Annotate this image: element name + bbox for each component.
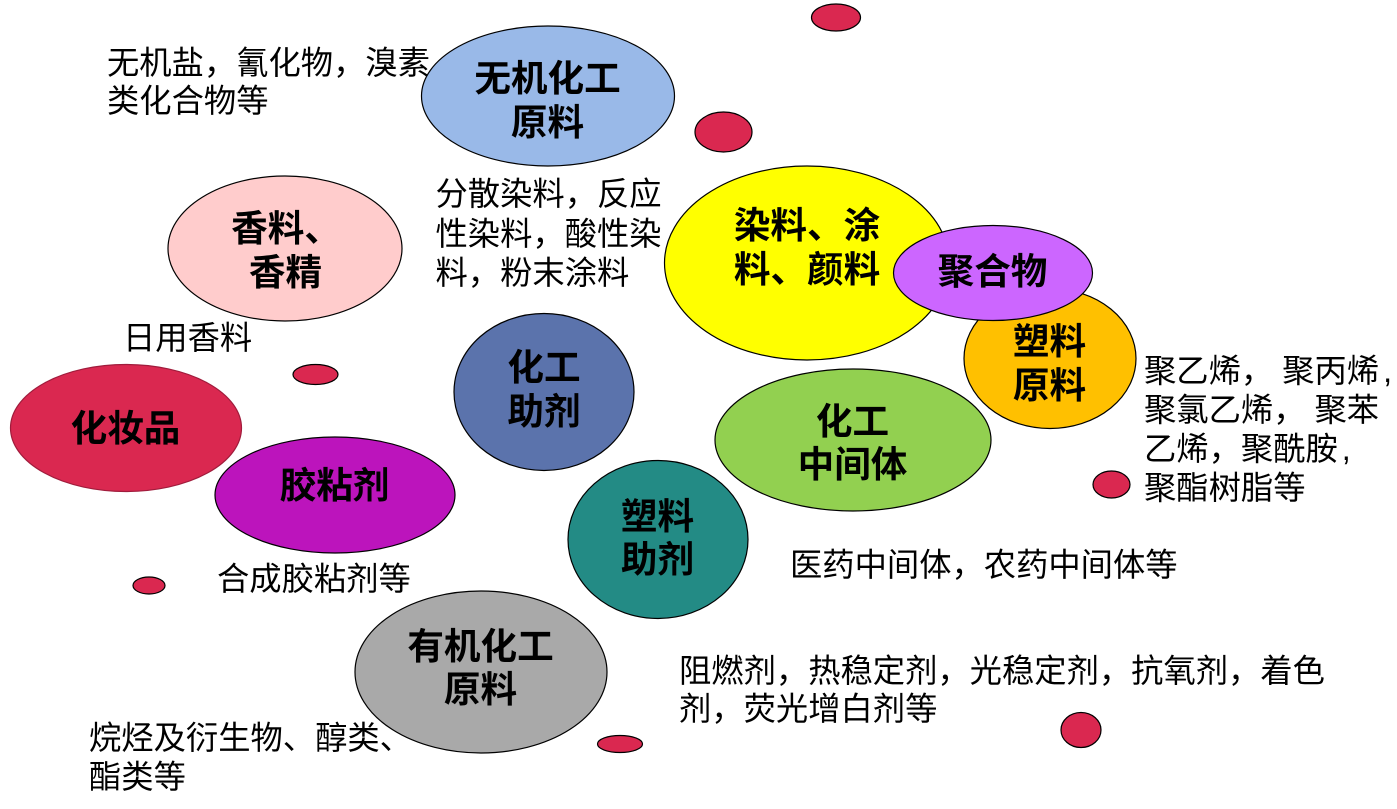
text: plastic examples	[1144, 353, 1392, 506]
bubble: plastic raw materials: 塑料	[1013, 321, 1086, 362]
bubble: adhesives: 胶粘剂	[280, 465, 389, 506]
bubble: inorganic raw materials: 无机化工	[474, 58, 621, 99]
text: plastic auxiliary examples: 剂，荧光增白剂等	[679, 691, 937, 727]
decorative dot: top	[812, 4, 860, 31]
bubble: organic raw materials: 有机化工	[407, 626, 554, 667]
text: plastic examples: 聚乙烯， 聚丙烯,	[1144, 353, 1392, 389]
bubble: plastic auxiliaries: 塑料	[621, 496, 694, 537]
text: organic examples	[89, 720, 412, 795]
decorative dot: left middle	[293, 364, 338, 384]
text: dye examples: 性染料，酸性染	[436, 216, 662, 252]
text: organic examples: 酯类等	[89, 759, 186, 795]
text: inorganic examples	[107, 45, 430, 119]
bubble: polymers: 聚合物	[938, 251, 1047, 292]
bubble: dyes and coatings	[664, 166, 950, 360]
bubble: organic raw materials	[355, 591, 607, 753]
text: plastic auxiliary examples: 阻燃剂，热稳定剂，光稳定剂，抗氧剂，着色	[679, 653, 1325, 689]
decorative dot: upper middle	[695, 112, 752, 152]
bubble: inorganic raw materials: 原料	[511, 102, 584, 143]
decorative dot: lower left	[133, 577, 165, 594]
text: dye examples: 料，粉末涂料	[436, 255, 629, 291]
bubble: inorganic raw materials	[422, 26, 674, 166]
bubble: adhesives	[215, 437, 455, 553]
bubble: dyes and coatings: 料、颜料	[734, 249, 880, 290]
text: plastic auxiliary examples	[679, 653, 1325, 727]
text: organic examples: 烷烃及衍生物、醇类、	[89, 720, 412, 756]
text: plastic examples: 聚酯树脂等	[1144, 470, 1306, 506]
bubble: fragrances: 香精	[249, 252, 322, 293]
text: intermediate examples: 医药中间体，农药中间体等	[790, 547, 1178, 583]
bubble: chemical auxiliaries	[454, 314, 634, 470]
bubble: polymers	[894, 226, 1092, 320]
bubble: dyes and coatings: 染料、涂	[734, 205, 881, 246]
decorative dot: bottom right	[1061, 712, 1101, 748]
bubble: fragrances: 香料、	[231, 208, 341, 249]
decorative dot: bottom middle	[598, 736, 642, 752]
text: daily fragrance: 日用香料	[123, 320, 252, 356]
bubble: chemical intermediates: 中间体	[798, 444, 908, 485]
text: plastic examples: 乙烯，聚酰胺,	[1144, 431, 1351, 467]
text: dye examples	[436, 176, 662, 291]
bubble: cosmetics	[10, 364, 242, 492]
text: dye examples: 分散染料，反应	[436, 176, 662, 212]
bubble: chemical auxiliaries: 化工	[507, 347, 581, 388]
bubble: plastic raw materials: 原料	[1013, 365, 1086, 406]
text: inorganic examples: 无机盐，氰化物，溴素	[107, 45, 430, 81]
bubble: plastic auxiliaries: 助剂	[621, 539, 694, 580]
bubble: plastic raw materials	[964, 288, 1136, 428]
bubble: chemical intermediates	[715, 369, 991, 511]
bubble: chemical auxiliaries: 助剂	[507, 391, 581, 432]
text: inorganic examples: 类化合物等	[107, 83, 268, 119]
bubble: plastic auxiliaries	[568, 460, 748, 618]
bubble: fragrances	[168, 176, 402, 321]
text: plastic examples: 聚氯乙烯， 聚苯	[1144, 392, 1379, 428]
decorative dot: right middle	[1093, 471, 1130, 498]
bubble: chemical intermediates: 化工	[816, 401, 889, 442]
text: adhesive examples: 合成胶粘剂等	[217, 561, 411, 597]
bubble: organic raw materials: 原料	[444, 669, 517, 710]
bubble: cosmetics: 化妆品	[71, 408, 180, 449]
